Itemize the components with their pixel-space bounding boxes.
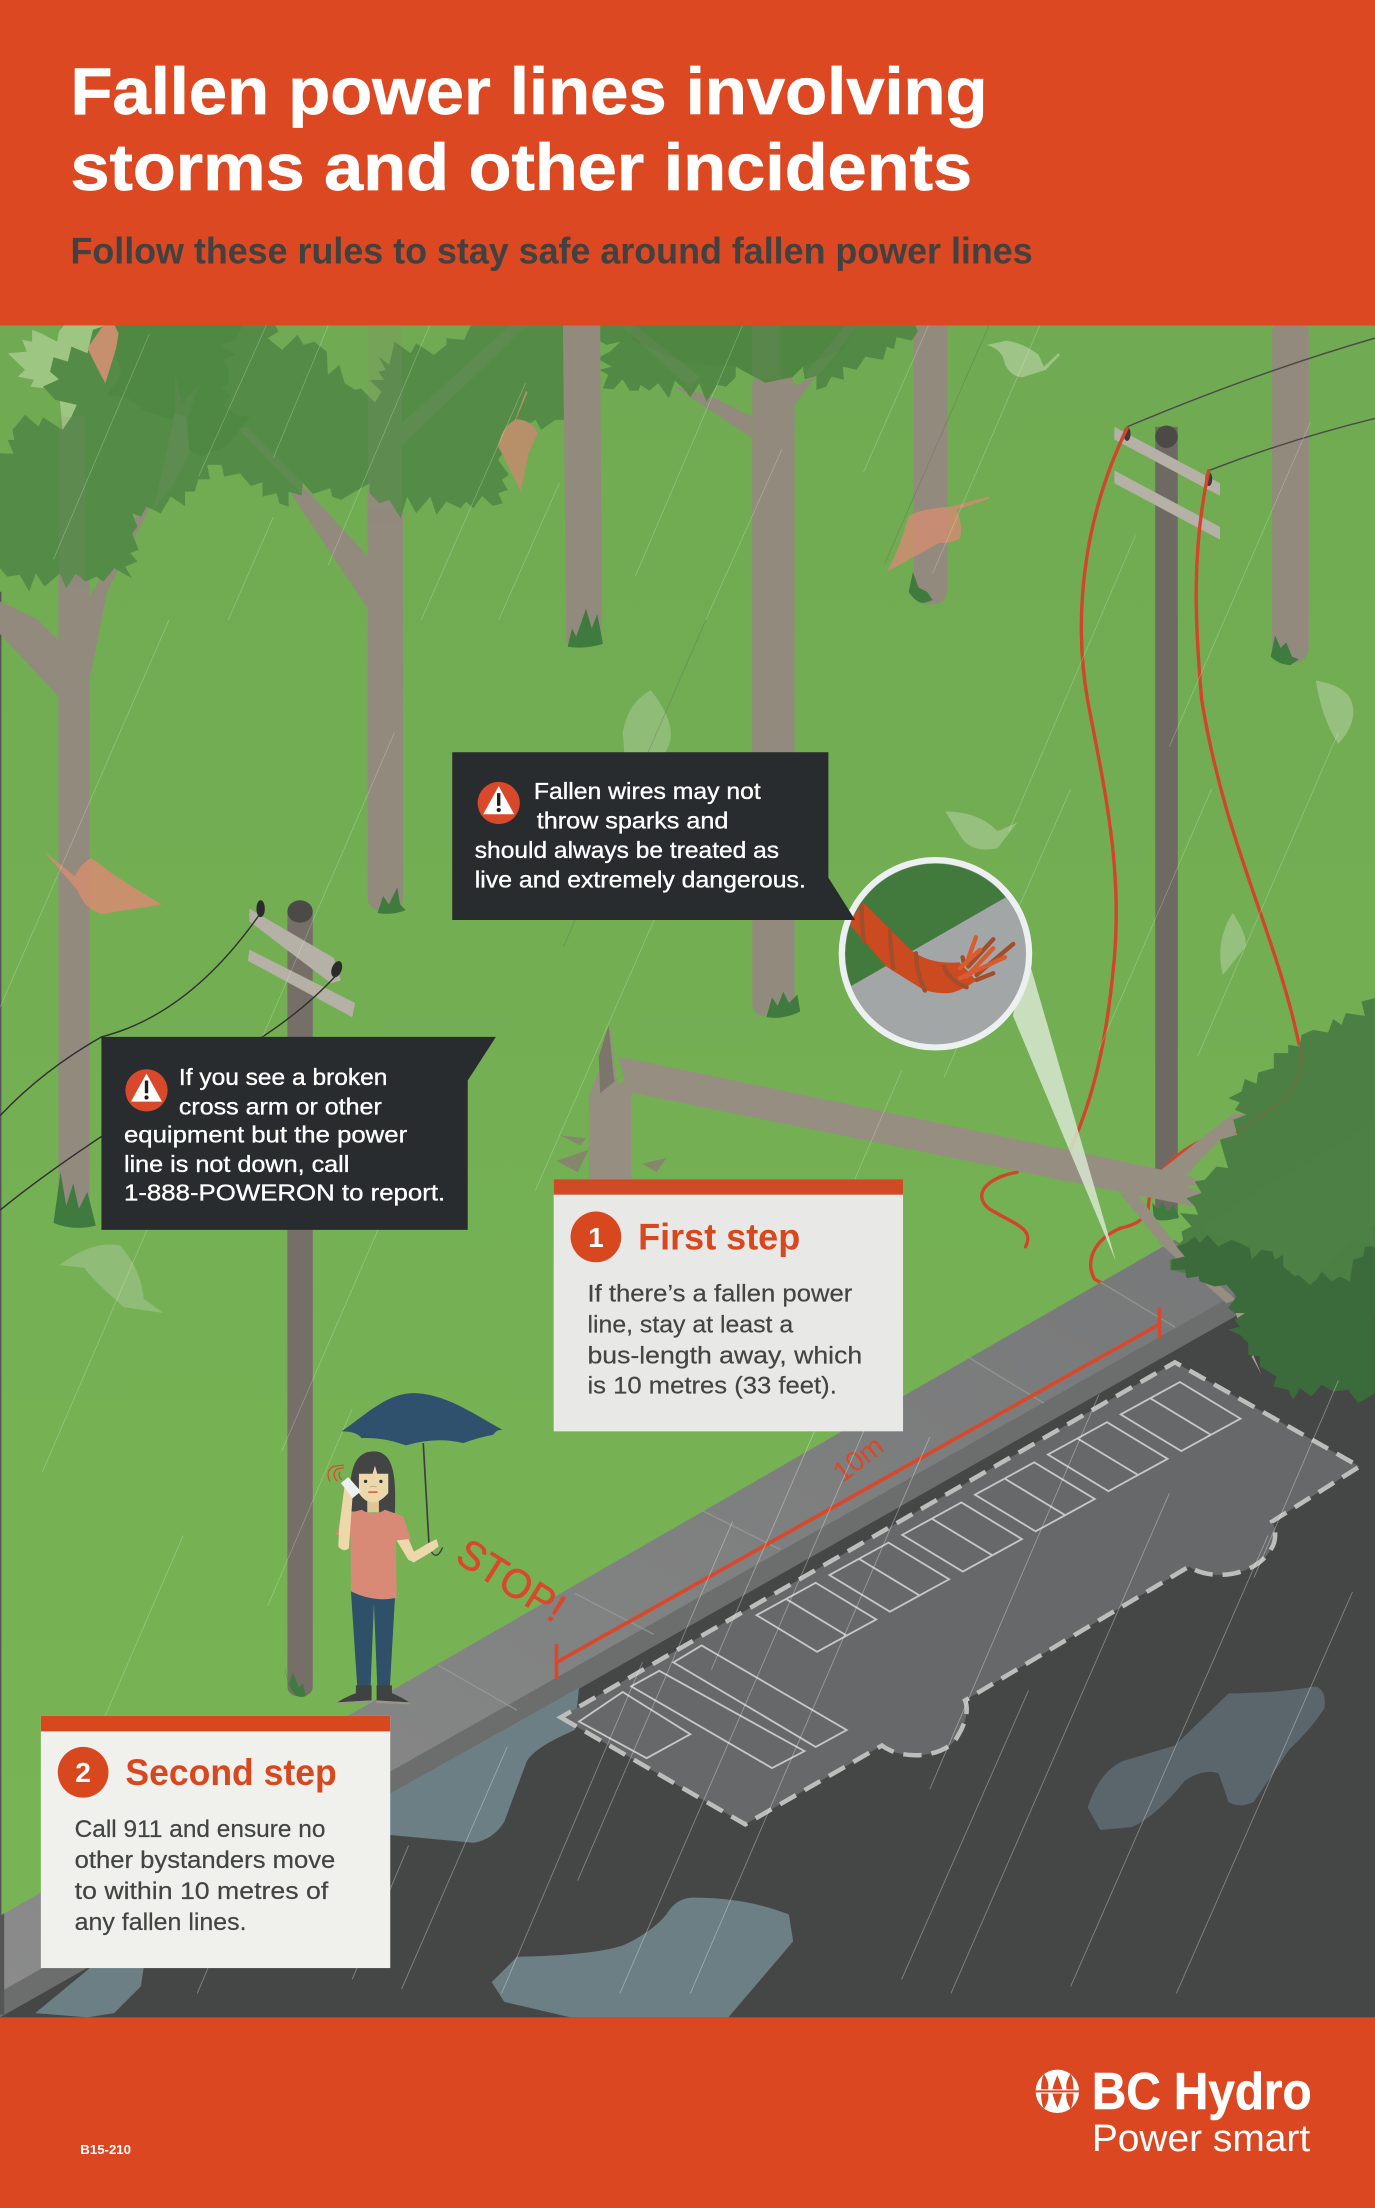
callout text: cross arm or other: [179, 1093, 382, 1119]
subtitle: Follow these rules to stay safe around fallen power lines: [70, 230, 1033, 271]
step body: Call 911 and ensure no: [75, 1816, 325, 1843]
magnified frayed wire: [831, 855, 1043, 1047]
callout text: [475, 778, 806, 893]
callout text: equipment but the power: [124, 1122, 407, 1148]
10m label: 10m: [826, 1429, 889, 1488]
header band: [0, 0, 1375, 325]
rain over grass: [0, 325, 1338, 1796]
rain over road and sidewalk: [197, 1381, 1352, 1993]
grass tuft on trunk C: [568, 609, 603, 648]
grass tufts at trunk bases: [54, 572, 1299, 1228]
right arm: [397, 1539, 439, 1562]
shirt: [336, 1510, 411, 1600]
title: Fallen power lines involving: [70, 55, 988, 129]
step heading: First step: [638, 1217, 800, 1258]
stump debris: [556, 1135, 666, 1172]
brown leaf over trunk: [887, 497, 990, 572]
step heading: Second step: [125, 1752, 337, 1793]
callout text: [124, 1064, 445, 1205]
logo mark: [1035, 2070, 1079, 2113]
shoes: [337, 1685, 372, 1702]
left utility pole with broken cross arm: [248, 900, 355, 1697]
step number: 1: [588, 1221, 604, 1253]
step number: [58, 1747, 108, 1798]
water puddles: [35, 1686, 1325, 2017]
logo wordmark: BC Hydro: [1092, 2063, 1312, 2121]
step number: [571, 1212, 621, 1262]
main leaf mass: [0, 325, 600, 592]
brown leaf top left: [87, 325, 119, 383]
right utility pole: [1114, 425, 1220, 1220]
brown leaf left: [44, 851, 162, 914]
step body: any fallen lines.: [75, 1909, 247, 1936]
bus-length outline on road: [561, 1362, 1360, 1824]
tree foliage, right crown: [596, 325, 918, 402]
phone signal: [328, 1465, 344, 1481]
step body: line, stay at least a: [587, 1312, 794, 1339]
red wire band: [848, 903, 976, 993]
fallen red wires: [982, 428, 1299, 1284]
trunks showing through foliage: [59, 325, 529, 587]
bus windows: [579, 1382, 1240, 1768]
callout text: 1-888-POWERON to report.: [124, 1179, 445, 1205]
broken fallen tree: [589, 1026, 1262, 1375]
callout: broken cross arm: [101, 1037, 496, 1230]
step body: [587, 1281, 862, 1399]
step body: bus-length away, which: [587, 1343, 862, 1370]
warning icon: [125, 1069, 168, 1112]
callout text: line is not down, call: [124, 1151, 349, 1177]
footer band: [0, 2017, 1375, 2208]
sidewalk and curb: [0, 1240, 1251, 2017]
tree foliage, left and centre: [0, 325, 600, 592]
BC Hydro logo: [1035, 2063, 1312, 2160]
callout text: Fallen wires may not: [534, 778, 761, 804]
ten metre measure line: [556, 1307, 1159, 1679]
callout text: live and extremely dangerous.: [475, 867, 806, 893]
roadside bush: [1170, 998, 1375, 1403]
road: [0, 1226, 1375, 2017]
neck: [367, 1496, 379, 1512]
left arm and phone: [338, 1483, 353, 1550]
callout text: should always be treated as: [475, 837, 779, 863]
umbrella: [342, 1393, 503, 1445]
trunk C over foliage: [563, 317, 602, 647]
standing tree trunks: [0, 317, 1309, 1227]
jeans: [351, 1591, 395, 1686]
step number: 2: [75, 1756, 91, 1788]
title: storms and other incidents: [70, 131, 972, 205]
step body: to within 10 metres of: [75, 1878, 329, 1905]
STOP warning text: STOP!: [449, 1530, 574, 1631]
overhead wires on left pole: [0, 913, 337, 1210]
title: [70, 55, 988, 205]
step 1 card: [554, 1179, 903, 1431]
magnifier beam: [1013, 950, 1116, 1261]
darker inner leaf mass: [107, 325, 250, 457]
grass background: [0, 317, 1375, 1923]
person on phone under umbrella: [328, 1393, 503, 1704]
falling leaves: [44, 325, 1353, 1313]
step body: other bystanders move: [75, 1847, 335, 1874]
document code: B15-210: [80, 2143, 131, 2157]
step body: is 10 metres (33 feet).: [587, 1372, 837, 1399]
logo tagline: Power smart: [1092, 2118, 1311, 2160]
pale background foliage: [8, 325, 154, 430]
callout: fallen wires: [452, 752, 855, 920]
warning icon: [478, 782, 520, 824]
step body: [75, 1816, 335, 1936]
intact overhead wires on right pole: [1127, 338, 1375, 471]
face: [359, 1466, 388, 1502]
pale green leaves: [987, 341, 1060, 377]
brown leaf in canopy: [498, 392, 537, 492]
callout text: throw sparks and: [537, 807, 728, 833]
step body: If there’s a fallen power: [587, 1281, 852, 1308]
step 2 card: [41, 1716, 390, 1968]
hair: [350, 1451, 395, 1513]
callout text: If you see a broken: [179, 1064, 387, 1090]
